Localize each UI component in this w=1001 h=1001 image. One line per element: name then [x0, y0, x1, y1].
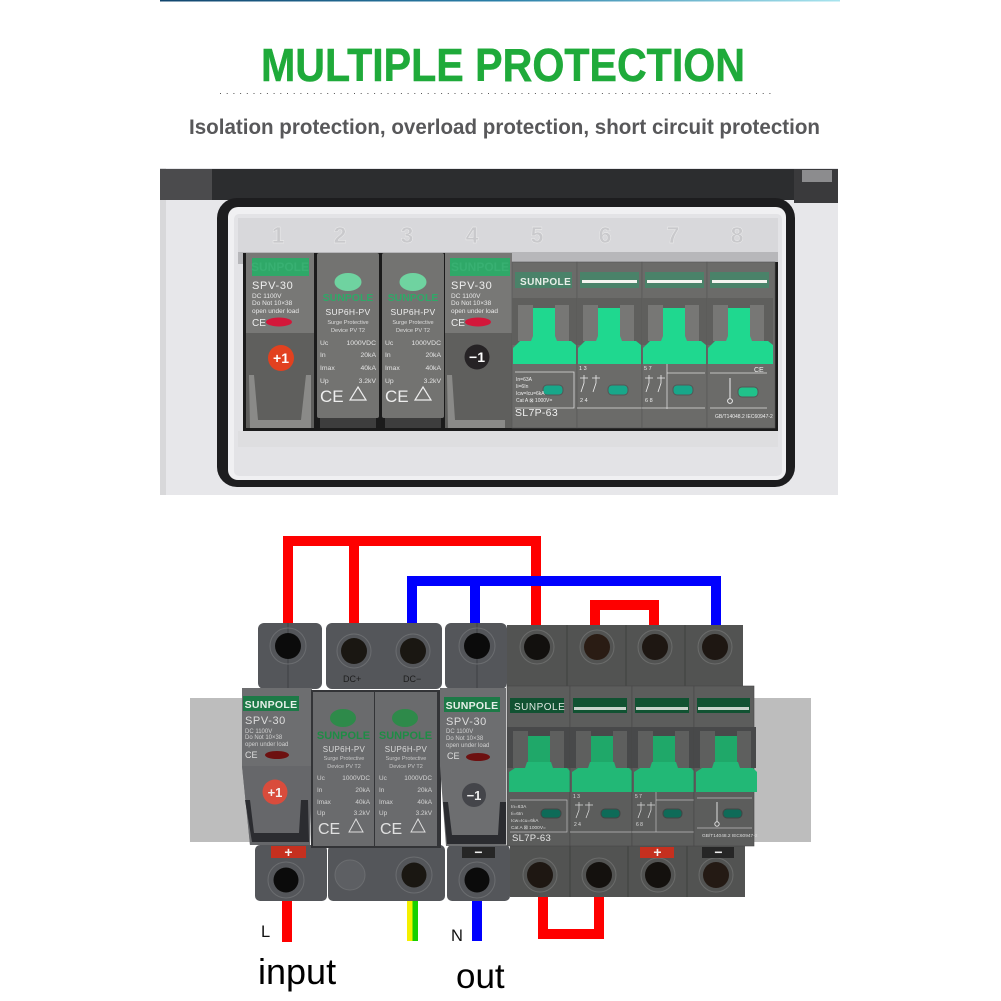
diagram breaker pole 2 — [570, 686, 633, 846]
diagram SUP6H-PV module right: CE — [380, 821, 402, 838]
wires: blue top link — [412, 581, 716, 625]
SUP6H-PV surge module 2: In — [320, 352, 326, 359]
SUP6H-PV surge module 3: Device PV T2 — [396, 328, 430, 334]
diagram SUP6H-PV module right: Uc — [379, 775, 388, 782]
SPV-30 positive fuse module: Do Not 10×38 — [252, 300, 293, 307]
diagram SUP6H-PV module right: 40kA — [417, 799, 433, 806]
diagram SUP6H-PV module right: Imax — [379, 799, 394, 806]
title: MULTIPLE PROTECTION — [261, 39, 745, 91]
SUP6H-PV surge module 2: Imax — [320, 365, 335, 372]
diagram SUP6H-PV module right: In — [379, 787, 385, 794]
SUP6H-PV surge module 2: SUP6H-PV — [326, 307, 370, 317]
wire: N output blue — [472, 899, 482, 941]
breaker pole 5: SL7P-63 — [515, 407, 558, 419]
diagram SUP6H-PV module left: Surge Protective — [324, 756, 364, 762]
diagram breaker pole 1: Ii=6In — [511, 811, 523, 817]
breaker pole 7: 5 7 — [644, 366, 652, 372]
SUP6H-PV surge module 2: CE — [320, 387, 344, 406]
diagram SUP6H-PV module right: 3.2kV — [416, 810, 433, 817]
diagram SUP6H-PV module right: Up — [379, 810, 388, 817]
diagram SUP6H-PV module right: SUP6H-PV — [385, 745, 428, 754]
breaker pole 6: 2 4 — [580, 398, 588, 404]
bottom terminals of breaker: + — [653, 844, 662, 860]
wires: red top link — [288, 541, 536, 625]
SUP6H-PV surge module 2: 20kA — [360, 352, 376, 359]
diagram breaker pole 3: 5 7 — [635, 794, 642, 800]
diagram SPV-30 positive module: CE — [245, 750, 258, 760]
embossed slot numbers: 3 — [401, 222, 413, 248]
diagram breaker pole 3: 6 8 — [636, 822, 643, 828]
top decorative banner edge — [160, 0, 840, 2]
diagram SPV-30 negative module — [440, 688, 506, 846]
diagram SUP6H-PV backing shadow — [311, 690, 441, 848]
breaker pole 5: Icw=Icu=6kA — [516, 391, 545, 397]
diagram breaker pole 1 — [507, 686, 571, 846]
embossed slot numbers: 6 — [599, 222, 611, 248]
wires: red jumper top — [595, 605, 654, 627]
breaker pole 8: CE — [754, 367, 764, 374]
top terminals of breaker — [507, 625, 743, 687]
diagram SUP6H-PV module left: Uc — [317, 775, 326, 782]
wire: L input red — [282, 899, 292, 942]
embossed slot numbers: 1 — [272, 222, 285, 248]
diagram breaker pole 1: Icw=Icu=6kA — [511, 818, 539, 824]
wire: earth yellow green — [407, 899, 418, 941]
SUP6H-PV surge module 3: 1000VDC — [412, 340, 441, 347]
diagram breaker pole 2: 1 3 — [573, 794, 580, 800]
SPV-30 negative fuse module: open under load — [451, 308, 498, 315]
diagram SUP6H-PV module left: 1000VDC — [342, 775, 370, 782]
SUP6H-PV surge module 3: Uc — [385, 340, 394, 347]
SPV-30 negative fuse module: SPV-30 — [451, 280, 493, 292]
breaker pole 5: In=63A — [516, 377, 533, 383]
diagram breaker pole 4 — [694, 686, 758, 846]
diagram SUP6H-PV module left: Imax — [317, 799, 332, 806]
bottom terminals of surge modules: − — [474, 844, 483, 860]
SPV-30 negative fuse module — [445, 253, 512, 428]
diagram SPV-30 negative module: Do Not 10×38 — [446, 736, 484, 742]
diagram SPV-30 positive module — [242, 688, 312, 845]
diagram breaker pole 1: SUNPOLE — [514, 702, 565, 713]
SPV-30 negative fuse module: DC 1100V — [451, 293, 481, 300]
breaker pole 7 — [642, 262, 707, 428]
diagram SUP6H-PV module left: In — [317, 787, 323, 794]
diagram SPV-30 positive module: open under load — [245, 742, 288, 748]
SPV-30 positive fuse module: SUNPOLE — [251, 260, 309, 274]
diagram SUP6H-PV module left: SUP6H-PV — [323, 745, 366, 754]
diagram SUP6H-PV module right — [375, 692, 437, 846]
diagram SUP6H-PV module right: 20kA — [417, 787, 433, 794]
panel: gray backing band of wiring diagram — [190, 698, 811, 842]
diagram breaker pole 2: 2 4 — [574, 822, 581, 828]
top terminals of surge modules — [258, 623, 507, 689]
SUP6H-PV surge module 3: SUNPOLE — [388, 292, 438, 304]
diagram SUP6H-PV module left: Device PV T2 — [327, 764, 361, 770]
breaker pole 5: Cat A ⊠ 1000V= — [516, 398, 552, 404]
diagram SPV-30 positive module: +1 — [268, 785, 282, 800]
diagram breaker pole 1: SL7P-63 — [512, 833, 551, 844]
diagram SPV-30 negative module: SUNPOLE — [446, 700, 498, 712]
SPV-30 negative fuse module: −1 — [469, 349, 485, 365]
SPV-30 positive fuse module: DC 1100V — [252, 293, 282, 300]
breaker pole 8: GB/T14048.2 IEC60947-2 — [715, 414, 773, 420]
embossed slot numbers: 4 — [466, 222, 479, 248]
SPV-30 negative fuse module: Do Not 10×38 — [451, 300, 492, 307]
SUP6H-PV surge module 2: 1000VDC — [347, 340, 376, 347]
diagram SPV-30 negative module: −1 — [467, 788, 481, 803]
diagram SPV-30 negative module: DC 1100V — [446, 729, 473, 735]
diagram SUP6H-PV module left — [313, 692, 374, 846]
SPV-30 positive fuse module — [246, 253, 314, 428]
SUP6H-PV surge module 2 — [317, 253, 379, 428]
diagram SUP6H-PV module right: SUNPOLE — [379, 730, 432, 742]
breaker pole 5: Ii=6In — [516, 384, 529, 390]
label: out: out — [456, 957, 505, 996]
SUP6H-PV surge module 3: Surge Protective — [392, 320, 434, 326]
embossed slot numbers: 7 — [667, 222, 679, 248]
diagram SUP6H-PV module left: CE — [318, 821, 340, 838]
SUP6H-PV surge module 3 — [382, 253, 444, 428]
breaker pole 6: 1 3 — [579, 366, 587, 372]
subtitle: Isolation protection, overload protection, short circuit protection — [189, 115, 820, 139]
bottom terminals of surge modules: + — [284, 844, 293, 860]
bottom terminals of breaker — [510, 844, 745, 897]
embossed slot numbers: 2 — [334, 222, 346, 248]
breaker pole 6 — [577, 262, 642, 428]
wires: red jumper bottom — [543, 895, 599, 934]
diagram SUP6H-PV module right: Device PV T2 — [389, 764, 423, 770]
SUP6H-PV surge module 3: 3.2kV — [424, 378, 441, 385]
embossed slot numbers — [272, 222, 744, 248]
diagram breaker pole 4: GB/T14048.2 IEC60947-2 — [702, 833, 758, 839]
bottom terminals of breaker: − — [714, 844, 723, 860]
breaker pole 8 — [707, 262, 775, 428]
SUP6H-PV surge module 3: In — [385, 352, 391, 359]
SPV-30 positive fuse module: CE — [252, 318, 266, 329]
SUP6H-PV surge module 3: SUP6H-PV — [391, 307, 435, 317]
diagram SPV-30 positive module: SUNPOLE — [245, 699, 297, 711]
diagram SUP6H-PV module left: SUNPOLE — [317, 730, 370, 742]
label: N: N — [451, 927, 463, 945]
SUP6H-PV surge module 2: Uc — [320, 340, 329, 347]
diagram SUP6H-PV module left: 20kA — [355, 787, 371, 794]
SUP6H-PV surge module 3: 20kA — [426, 352, 441, 359]
SUP6H-PV surge module 2: Device PV T2 — [331, 328, 365, 334]
SUP6H-PV surge module 2: SUNPOLE — [323, 292, 373, 304]
SUP6H-PV surge module 2: Surge Protective — [327, 320, 369, 326]
SUP6H-PV surge module 3: Up — [385, 378, 394, 385]
breaker pole 5 — [512, 262, 577, 428]
diagram SPV-30 negative module: SPV-30 — [446, 716, 487, 728]
top terminals of surge modules: DC− — [403, 674, 421, 684]
panel: photo of installed protection box — [160, 168, 838, 495]
embossed slot numbers: 5 — [531, 222, 544, 248]
diagram SUP6H-PV module left: Up — [317, 810, 326, 817]
SUP6H-PV surge module 3: Imax — [385, 365, 400, 372]
SUP6H-PV surge module 3: CE — [385, 387, 409, 406]
label: L: L — [261, 923, 270, 941]
diagram SUP6H-PV module right: 1000VDC — [404, 775, 432, 782]
breaker pole 7: 6 8 — [645, 398, 653, 404]
diagram SUP6H-PV module left: 40kA — [355, 799, 371, 806]
diagram breaker pole 3 — [632, 686, 695, 846]
breaker pole 5: SUNPOLE — [520, 277, 571, 288]
SPV-30 negative fuse module: SUNPOLE — [451, 260, 509, 274]
SUP6H-PV surge module 3: 40kA — [426, 365, 441, 372]
SPV-30 positive fuse module: +1 — [273, 350, 289, 366]
top terminals of surge modules: DC+ — [343, 674, 361, 684]
SPV-30 negative fuse module: CE — [451, 318, 465, 329]
SPV-30 positive fuse module: SPV-30 — [252, 280, 294, 292]
diagram SUP6H-PV module right: Surge Protective — [386, 756, 426, 762]
SUP6H-PV surge module 2: 3.2kV — [359, 378, 376, 385]
diagram SPV-30 positive module: Do Not 10×38 — [245, 735, 283, 741]
SPV-30 positive fuse module: open under load — [252, 308, 299, 315]
label: input: input — [258, 951, 336, 992]
embossed slot numbers: 8 — [731, 222, 744, 248]
diagram SPV-30 negative module: open under load — [446, 743, 489, 749]
diagram SPV-30 positive module: SPV-30 — [245, 715, 286, 727]
bottom terminals of surge modules — [255, 844, 510, 901]
diagram breaker pole 1: In=63A — [511, 804, 527, 810]
SUP6H-PV surge module 2: Up — [320, 378, 329, 385]
diagram SPV-30 negative module: CE — [447, 751, 460, 761]
diagram SPV-30 positive module: DC 1100V — [245, 729, 272, 735]
diagram SUP6H-PV module left: 3.2kV — [354, 810, 371, 817]
diagram breaker pole 1: Cat A ⊠ 1000V= — [511, 825, 546, 831]
SUP6H-PV surge module 2: 40kA — [360, 365, 376, 372]
